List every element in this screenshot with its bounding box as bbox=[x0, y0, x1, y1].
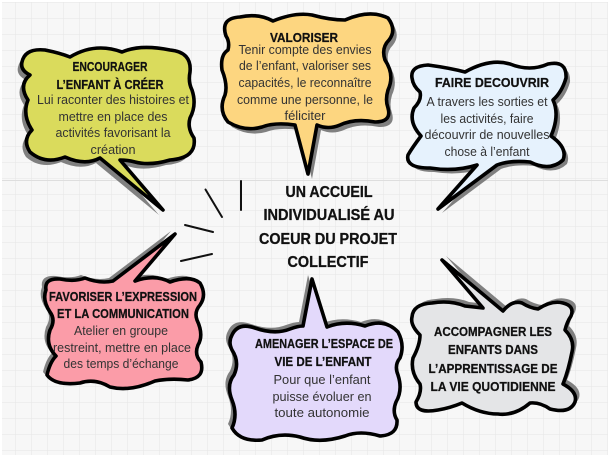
panel: faire découvrir: découvrir de nouvelles bbox=[424, 127, 550, 142]
panel: encourager l'enfant à créer bbox=[18, 47, 194, 215]
panel: accompagner les enfants: ENFANTS DANS bbox=[448, 343, 538, 357]
central title: COEUR DU PROJET bbox=[259, 231, 397, 248]
panel: encourager l'enfant à créer: création bbox=[90, 142, 136, 157]
panel: faire découvrir: les activités, faire bbox=[440, 111, 534, 126]
panel: accompagner les enfants: L’APPRENTISSAGE DE bbox=[428, 362, 558, 376]
panel: faire découvrir: FAIRE DECOUVRIR bbox=[435, 76, 549, 90]
panel: accompagner les enfants bbox=[412, 256, 580, 414]
panel: faire découvrir bbox=[408, 62, 570, 213]
central title: UN ACCUEIL bbox=[286, 184, 372, 201]
panel: aménager l'espace de vie de l'enfant: toute autonomie bbox=[274, 405, 370, 420]
panel: valoriser: de l’enfant, valoriser ses bbox=[239, 58, 371, 73]
panel: aménager l'espace de vie de l'enfant: AMENAGER L’ESPACE DE bbox=[255, 337, 393, 351]
panel: encourager l'enfant à créer: L’ENFANT À CRÉER bbox=[56, 77, 164, 92]
panel: favoriser l'expression et la communication: Atelier en groupe bbox=[74, 323, 168, 338]
panel: faire découvrir: A travers les sorties et bbox=[426, 94, 548, 109]
central title: INDIVIDUALISÉ AU bbox=[264, 207, 394, 224]
panel: favoriser l'expression et la communication: ET LA COMMUNICATION bbox=[57, 307, 189, 321]
rays around the central title bbox=[181, 181, 241, 261]
panel: accompagner les enfants: LA VIE QUOTIDIENNE bbox=[430, 380, 556, 394]
panel: faire découvrir: chose à l’enfant bbox=[444, 144, 530, 159]
panel: encourager l'enfant à créer: ENCOURAGER bbox=[72, 60, 148, 74]
central title: COLLECTIF bbox=[288, 254, 368, 271]
panel: aménager l'espace de vie de l'enfant: puisse évoluer en bbox=[272, 389, 372, 404]
panel: aménager l'espace de vie de l'enfant: Pour que l’enfant bbox=[274, 372, 371, 387]
panel: valoriser: féliciter bbox=[284, 108, 326, 123]
panel: aménager l'espace de vie de l'enfant: VIE DE L’ENFANT bbox=[274, 355, 372, 369]
panel: favoriser l'expression et la communication bbox=[41, 231, 203, 389]
panel: encourager l'enfant à créer: mettre en place des bbox=[58, 109, 168, 124]
panel: valoriser: comme une personne, le bbox=[237, 92, 373, 107]
panel: encourager l'enfant à créer: Lui raconter des histoires et bbox=[37, 92, 189, 107]
panel: valoriser: Tenir compte des envies bbox=[238, 42, 372, 57]
panel: favoriser l'expression et la communication: restreint, mettre en place bbox=[53, 340, 191, 355]
panel: aménager l'espace de vie de l'enfant bbox=[225, 275, 402, 440]
panel: valoriser bbox=[222, 14, 397, 179]
central title bbox=[259, 184, 397, 271]
panel: favoriser l'expression et la communication: FAVORISER L’EXPRESSION bbox=[49, 290, 197, 304]
panel: favoriser l'expression et la communication: des temps d’échange bbox=[64, 356, 178, 371]
panel: accompagner les enfants: ACCOMPAGNER LES bbox=[434, 325, 552, 339]
panel: valoriser: VALORISER bbox=[270, 31, 338, 45]
panel: valoriser: capacités, le reconnaître bbox=[238, 75, 372, 90]
panel: encourager l'enfant à créer: activités favorisant la bbox=[56, 125, 171, 140]
